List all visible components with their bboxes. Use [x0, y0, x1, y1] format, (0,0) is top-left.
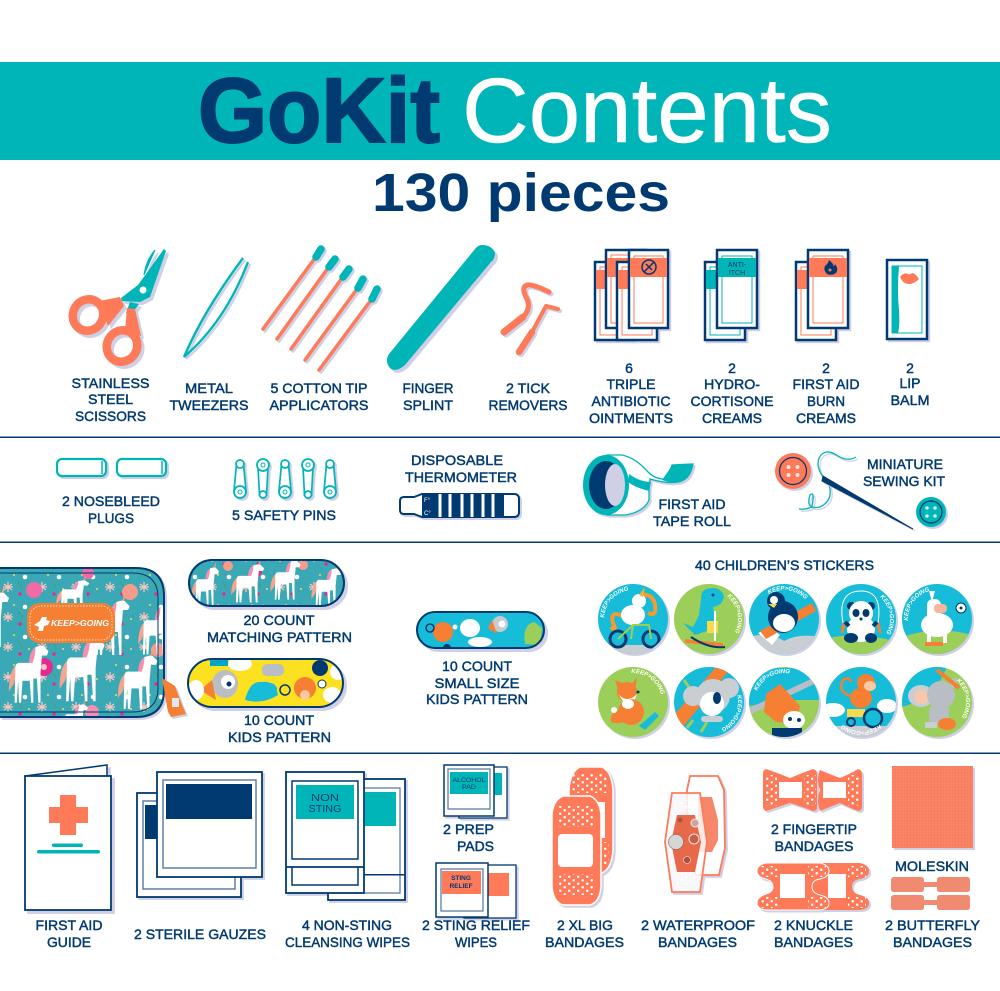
icon: hydrocortisone cream packets: ANTI- [728, 262, 747, 269]
icon: prep pads: PAD [462, 785, 477, 791]
label: hydrocortisone: 2 [728, 360, 736, 376]
sticker: penguin on snowboard: KEEP>GOING [768, 586, 808, 598]
label: triple antibiotic [589, 360, 673, 426]
label: butterfly bandages [885, 917, 981, 950]
label: sting relief wipes: 2 STING RELIEF [422, 917, 530, 933]
panel: tools and creams row [67, 245, 929, 426]
label: triple antibiotic: ANTIBIOTIC [592, 393, 670, 409]
icon: sting relief wipes: RELIEF [449, 883, 473, 890]
label: finger splint [402, 380, 454, 413]
label: xl bandages: 2 XL BIG [557, 917, 613, 933]
sticker: monkey on tricycle: KEEP>GOING [840, 724, 881, 736]
icon: sting relief wipes [436, 863, 516, 918]
panel: small supplies row [57, 452, 946, 529]
label: hydrocortisone: CREAMS [702, 410, 762, 426]
label: finger splint: FINGER [402, 380, 454, 396]
sticker: elephant with bat [902, 667, 974, 739]
label: waterproof bandages: 2 WATERPROOF [641, 917, 755, 933]
icon: non-sting wipes: NON [311, 793, 339, 804]
icon: sewing kit [775, 452, 946, 529]
label: butterfly bandages: 2 BUTTERFLY [885, 917, 981, 933]
icon: fingertip bandages [763, 769, 862, 811]
label: xl bandages [545, 917, 624, 950]
label: nosebleed plugs [62, 493, 160, 526]
label: scissors [72, 375, 150, 424]
icon: sterile gauzes [137, 772, 262, 897]
label: first aid guide: GUIDE [47, 934, 91, 950]
icon: zipper pull [162, 678, 186, 717]
icon: scissors [67, 249, 166, 367]
label: cleansing wipes: CLEANSING WIPES [285, 934, 410, 950]
icon: prep pads: ALCOHOL [452, 778, 486, 784]
icon: small kids pattern bandage [417, 612, 544, 652]
title banner [0, 60, 1000, 162]
sticker: elephant with bat: KEEP>GOING [956, 678, 970, 718]
label: triple antibiotic: OINTMENTS [589, 410, 673, 426]
label: hydrocortisone [690, 360, 774, 426]
pouch logo tag: KEEP>GOING [51, 618, 109, 628]
sticker: monkey on tricycle [826, 667, 898, 739]
label: tick removers: REMOVERS [488, 397, 568, 413]
icon: unicorn pattern bandage [189, 554, 344, 607]
label: sewing kit [863, 456, 945, 489]
icon: safety pins [234, 459, 336, 498]
icon: non-sting wipes [286, 772, 405, 900]
label: small kids bandages: SMALL SIZE [434, 675, 520, 691]
label: cotton tips [270, 380, 368, 413]
label: lip balm: 2 [906, 360, 914, 376]
icon: tape roll [583, 455, 693, 515]
label: stickers heading: 40 CHILDREN’S STICKERS [695, 557, 874, 573]
label: sewing kit: SEWING KIT [863, 473, 945, 489]
label: kids bandages [228, 712, 331, 745]
sticker: t-rex on scooter: KEEP>GOING [727, 594, 742, 634]
label: matching bandages: MATCHING PATTERN [207, 629, 352, 645]
label: first aid guide [36, 917, 103, 950]
label: cotton tips: APPLICATORS [270, 397, 368, 413]
icon: lip balm packet [887, 260, 927, 339]
label: nosebleed plugs: PLUGS [88, 510, 134, 526]
icon: xl bandages [552, 767, 613, 905]
icon: nosebleed plugs [57, 459, 166, 476]
label: tick removers: 2 TICK [506, 380, 551, 396]
icon: sting relief wipes: STING [451, 875, 471, 882]
label: small kids bandages [426, 658, 528, 707]
sticker: penguin on snowboard [749, 584, 821, 656]
label: hydrocortisone: HYDRO- [704, 376, 760, 392]
label: sterile gauzes: 2 STERILE GAUZES [134, 926, 266, 942]
label: first aid guide: FIRST AID [36, 917, 103, 933]
label: triple antibiotic: TRIPLE [606, 376, 656, 392]
label: scissors: STAINLESS [72, 375, 150, 391]
label: lip balm: BALM [890, 392, 930, 408]
label: moleskin: MOLESKIN [895, 858, 969, 874]
label: tape roll: FIRST AID [658, 496, 726, 512]
label: burn creams: CREAMS [796, 410, 856, 426]
sticker: fox on skateboard: KEEP>GOING [631, 668, 665, 694]
sticker: llama with soccer ball: KEEP>GOING [904, 587, 929, 621]
label: fingertip bandages: BANDAGES [774, 838, 854, 854]
sticker: t-rex on scooter [674, 584, 746, 656]
icon: tick removers [504, 285, 558, 352]
title banner: Contents [462, 60, 832, 162]
label: sewing kit: MINIATURE [867, 456, 943, 472]
icon: finger splint [387, 245, 495, 370]
icon: triple antibiotic ointment packets [595, 250, 668, 340]
label: small kids bandages: 10 COUNT [442, 658, 512, 674]
sticker: fox on skateboard [598, 667, 670, 739]
icon: knuckle bandages [757, 863, 869, 910]
label: tick removers [488, 380, 568, 413]
label: waterproof bandages: BANDAGES [658, 934, 737, 950]
panel: guide, wipes and bandages row [25, 765, 981, 950]
label: thermometer: DISPOSABLE [411, 452, 503, 468]
label: nosebleed plugs: 2 NOSEBLEED [62, 493, 160, 509]
icon: thermometer: F° [424, 498, 431, 504]
label: xl bandages: BANDAGES [545, 934, 624, 950]
label: fingertip bandages [771, 821, 857, 854]
label: tape roll: TAPE ROLL [653, 513, 731, 529]
icon: waterproof bandages [665, 776, 725, 892]
icon: hydrocortisone cream packets [705, 250, 757, 340]
label: lip balm [890, 360, 930, 408]
sticker: unicorn on bike [598, 584, 670, 656]
icon: moleskin [892, 766, 973, 848]
label: burn creams: 2 [822, 360, 830, 376]
sticker: koala on branch [674, 667, 746, 739]
label: kids bandages: 10 COUNT [244, 712, 314, 728]
sticker: sloth on branch: KEEP>GOING [754, 668, 790, 691]
label: scissors: STEEL [88, 391, 133, 407]
label: safety pins: 5 SAFETY PINS [232, 507, 336, 523]
label: butterfly bandages: BANDAGES [893, 934, 972, 950]
label: cleansing wipes [285, 917, 410, 950]
icon: tweezers [184, 258, 248, 357]
subtitle: piece count: 130 pieces [372, 163, 670, 223]
label: triple antibiotic: 6 [625, 360, 633, 376]
icon: hydrocortisone cream packets: ITCH [729, 270, 745, 277]
label: matching bandages: 20 COUNT [244, 612, 315, 628]
label: thermometer: THERMOMETER [405, 469, 517, 485]
label: prep pads: 2 PREP [443, 821, 494, 837]
panel: pouch, patterned bandages and stickers row [0, 557, 974, 745]
label: lip balm: LIP [900, 375, 920, 391]
title banner: GoKit [198, 60, 440, 162]
label: tweezers: TWEEZERS [170, 397, 248, 413]
label: cleansing wipes: 4 NON-STING [302, 917, 392, 933]
sticker: unicorn on bike: KEEP>GOING [600, 586, 628, 618]
label: waterproof bandages [641, 917, 755, 950]
icon: thermometer: C° [424, 511, 431, 517]
label: sting relief wipes: WIPES [455, 934, 497, 950]
icon: unicorn pouch [0, 567, 167, 720]
icon: first aid guide [25, 765, 111, 910]
label: burn creams: FIRST AID [792, 376, 860, 392]
icon: non-sting wipes: STING [308, 804, 342, 815]
label: hydrocortisone: CORTISONE [690, 393, 774, 409]
icon: burn cream packets [796, 250, 848, 340]
label: small kids bandages: KIDS PATTERN [426, 691, 528, 707]
label: burn creams: BURN [807, 393, 845, 409]
label: sting relief wipes [422, 917, 530, 950]
label: prep pads [443, 821, 494, 854]
icon: butterfly bandages [891, 877, 970, 910]
label: finger splint: SPLINT [403, 397, 453, 413]
label: thermometer [405, 452, 517, 485]
sticker: sloth on branch [749, 667, 821, 739]
sticker: llama with soccer ball [902, 584, 974, 656]
icon: prep pads [444, 765, 507, 818]
label: burn creams [792, 360, 860, 426]
label: prep pads: PADS [457, 838, 494, 854]
icon: cotton tip applicators [263, 249, 377, 370]
label: tweezers: METAL [185, 380, 233, 396]
label: knuckle bandages [774, 917, 853, 950]
sticker: koala on branch: KEEP>GOING [722, 695, 742, 732]
label: fingertip bandages: 2 FINGERTIP [771, 821, 857, 837]
label: scissors: SCISSORS [75, 408, 146, 424]
label: knuckle bandages: BANDAGES [774, 934, 853, 950]
icon: kids pattern bandage [188, 657, 346, 707]
label: cotton tips: 5 COTTON TIP [270, 380, 368, 396]
pouch logo tag [27, 603, 115, 643]
label: knuckle bandages: 2 KNUCKLE [774, 917, 853, 933]
sticker: panda skipping rope [826, 584, 898, 656]
icon: thermometer [400, 494, 519, 517]
sticker: panda skipping rope: KEEP>GOING [880, 594, 894, 634]
label: matching bandages [207, 612, 352, 645]
label: kids bandages: KIDS PATTERN [228, 729, 331, 745]
label: tweezers [170, 380, 248, 413]
label: tape roll [653, 496, 731, 529]
